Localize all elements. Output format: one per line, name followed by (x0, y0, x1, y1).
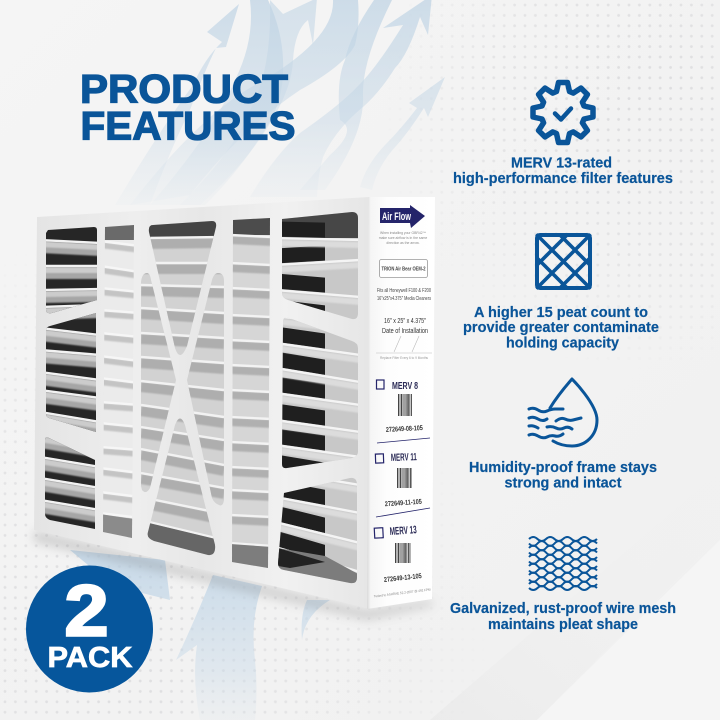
pleats column 2 (103, 225, 134, 538)
title: FEATURES (80, 104, 296, 148)
pleats column 5 (275, 210, 360, 590)
badge: 2 pack: PACK (48, 642, 133, 674)
feature 3: strong and intact (504, 474, 622, 492)
feature 4 (450, 537, 676, 633)
pleats column 3 (141, 221, 224, 556)
product: box side label (367, 197, 435, 609)
merv 8 option: MERV 8 (392, 380, 418, 392)
replace note: Replace Filter Every 6 to 9 Months (380, 355, 428, 360)
feature 1 (453, 82, 673, 187)
icon: gear with check (533, 82, 593, 142)
model label: TRION Air Bear OEM-2 (382, 266, 426, 272)
install note: direction as the arrow. (386, 241, 420, 245)
feature 3 (469, 379, 657, 492)
merv 13 option: 272649-13-105 (384, 573, 422, 584)
pleats column 4 (232, 218, 270, 568)
title: PRODUCT (80, 68, 288, 112)
model label (380, 260, 428, 278)
merv 8 option: 272649-08-105 (386, 425, 423, 434)
icon: filter grid (535, 233, 592, 290)
text: Galvanized, rust-proof wire mesh (450, 600, 676, 617)
merv 8 option (376, 380, 423, 434)
title (80, 68, 296, 148)
product: air filter front (34, 197, 369, 608)
airflow arrows: upper (115, 0, 445, 205)
feature 2: holding capacity (506, 334, 620, 352)
feature 4: maintains pleat shape (488, 616, 638, 633)
size and date (382, 316, 428, 335)
air flow logo: Air Flow (382, 211, 411, 223)
install note: When installing your GBR42™ (380, 231, 426, 235)
merv 11 option: MERV 11 (391, 451, 417, 464)
air flow logo (380, 205, 425, 228)
fit text: Fits all Honeywell F100 & F200 (377, 288, 431, 294)
badge: 2 pack: 2 (64, 572, 108, 652)
airflow arrows: lower (70, 550, 330, 720)
merv 13 option: MERV 13 (389, 524, 417, 538)
badge: 2 pack (26, 566, 153, 692)
feature 2: provide greater contaminate (463, 319, 659, 336)
filter drop shadow (34, 530, 432, 620)
install note: make sure airflow is in the same (379, 236, 427, 240)
feature 1: high-performance filter features (453, 170, 673, 187)
test note: Tested to ASHRAE 52.2-2007 @ 492 FPM (374, 588, 431, 598)
pleats column 1 (45, 227, 97, 529)
fit text (377, 288, 431, 302)
merv 11 option (375, 451, 422, 508)
icon: water drop with waves (529, 379, 597, 446)
text: Humidity-proof frame stays (469, 459, 657, 476)
fit text: 16"x25"x4.375" Media Cleaners (377, 296, 431, 302)
text: A higher 15 peat count to (474, 304, 648, 321)
install note (379, 231, 427, 245)
feature 2 (463, 233, 659, 352)
size and date: 16" x 25" x 4.375" (384, 316, 426, 325)
merv 11 option: 272649-11-105 (385, 499, 422, 508)
merv 13 option (374, 524, 422, 584)
size and date: Date of Installation (382, 326, 428, 335)
icon: wire mesh (529, 537, 597, 590)
text: MERV 13-rated (511, 154, 612, 172)
